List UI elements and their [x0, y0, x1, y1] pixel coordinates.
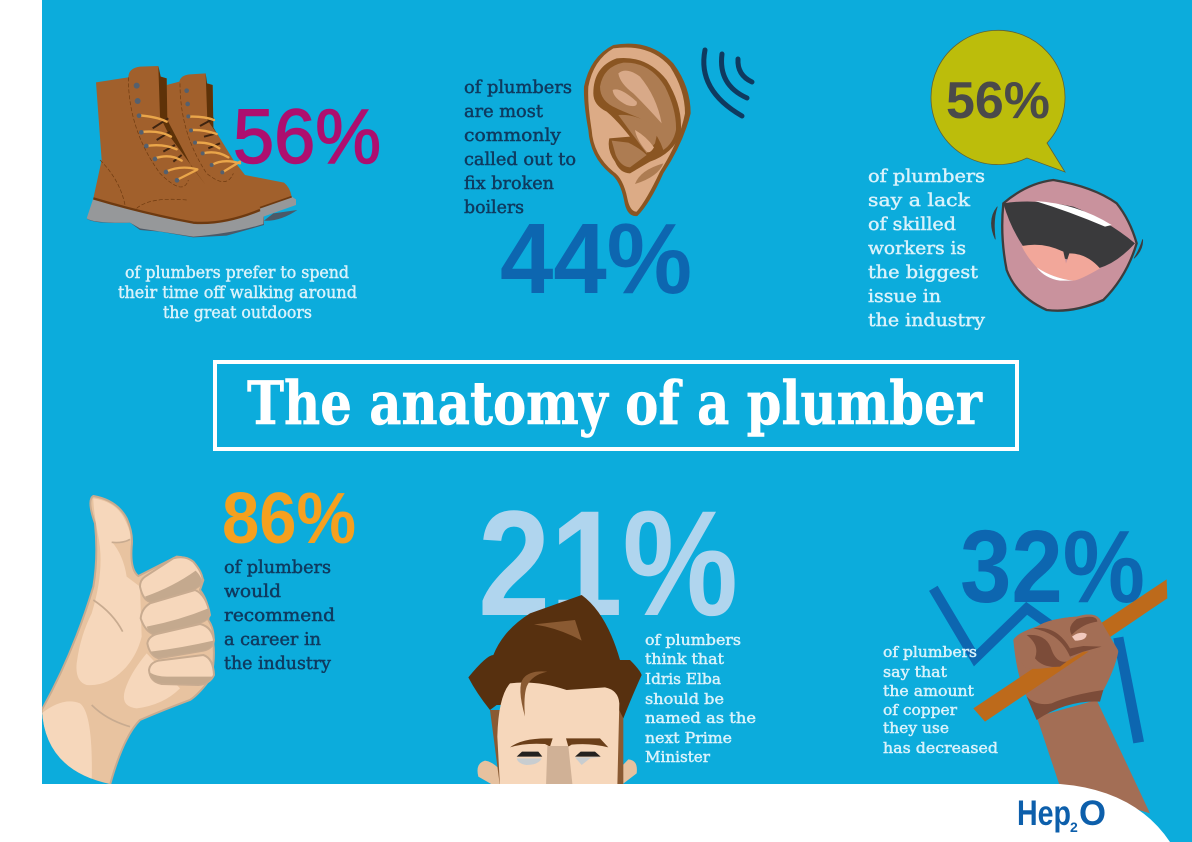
text: copper caption: say that	[883, 663, 947, 681]
text: copper caption: they use	[883, 719, 949, 737]
text: skilled workers caption: issue in	[868, 286, 941, 307]
stat: 32% blue: 32%	[960, 509, 1145, 624]
text: boilers caption: are most	[464, 101, 544, 122]
text: skilled workers caption: the biggest	[868, 262, 979, 283]
text: Idris Elba caption: should be	[645, 690, 724, 708]
text: copper caption: the amount	[883, 682, 974, 700]
icon: boots	[87, 66, 297, 237]
footer white band	[0, 784, 1170, 842]
text: copper caption: of copper	[883, 701, 958, 719]
text: Idris Elba caption: Minister	[645, 748, 711, 766]
text: boilers caption: fix broken	[464, 173, 554, 194]
logo: Hep2O: O	[1079, 794, 1106, 833]
icon: mouth	[991, 180, 1143, 311]
text: copper caption: of plumbers	[883, 643, 977, 661]
text: recommend caption: recommend	[224, 605, 335, 626]
panel: copper statistic	[883, 509, 1167, 813]
text: outdoors caption: the great outdoors	[163, 303, 312, 323]
stat: 56% magenta: 56%	[233, 94, 381, 180]
title: The anatomy of a plumber	[247, 369, 983, 439]
text: recommend caption: would	[224, 581, 281, 602]
text: outdoors caption: of plumbers prefer to spend	[125, 263, 349, 283]
stat: 56% in bubble: 56%	[946, 72, 1050, 130]
panel: boots statistic	[87, 66, 381, 323]
text: boilers caption	[464, 77, 576, 218]
text: copper caption: has decreased	[883, 739, 998, 757]
text: boilers caption: commonly	[464, 125, 562, 146]
text: recommend caption: a career in	[224, 629, 321, 650]
text: Idris Elba caption: think that	[645, 650, 724, 668]
text: boilers caption: boilers	[464, 197, 524, 218]
icon: thumbs up hand	[42, 496, 214, 785]
text: skilled workers caption: workers is	[868, 238, 966, 259]
icon: speech bubble	[931, 30, 1065, 172]
icon: man's head	[468, 595, 642, 790]
stat: 44% blue: 44%	[500, 203, 692, 315]
text: outdoors caption	[118, 263, 357, 323]
text: skilled workers caption	[868, 166, 986, 331]
panel: thumbs up statistic	[42, 479, 356, 785]
icon: sound waves	[704, 50, 752, 116]
title box	[215, 362, 1017, 449]
icon: fist gripping copper pipe over a falling line chart	[933, 579, 1167, 813]
panel: Idris Elba statistic	[468, 510, 756, 784]
stat: 21% pale blue: 21%	[478, 479, 738, 647]
text: skilled workers caption: the industry	[868, 310, 986, 331]
text: skilled workers caption: of plumbers	[868, 166, 985, 187]
text: recommend caption	[224, 557, 335, 674]
logo: Hep2O: Hep	[1017, 794, 1071, 833]
stat: 86% orange: 86%	[222, 479, 356, 559]
text: outdoors caption: their time off walking around	[118, 283, 357, 303]
text: Idris Elba caption: Idris Elba	[645, 670, 721, 688]
text: Idris Elba caption	[645, 631, 756, 766]
text: recommend caption: the industry	[224, 653, 332, 674]
text: Idris Elba caption: next Prime	[645, 729, 732, 747]
text: skilled workers caption: of skilled	[868, 214, 956, 235]
text: recommend caption: of plumbers	[224, 557, 331, 578]
text: copper caption	[883, 643, 998, 757]
panel: ear statistic	[464, 44, 752, 315]
text: Idris Elba caption: of plumbers	[645, 631, 741, 649]
panel: mouth statistic	[868, 30, 1143, 331]
text: Idris Elba caption: named as the	[645, 709, 756, 727]
text: boilers caption: of plumbers	[464, 77, 572, 98]
text: skilled workers caption: say a lack	[868, 190, 971, 211]
icon: ear	[584, 44, 691, 216]
logo: Hep2O: 2	[1070, 819, 1078, 835]
text: boilers caption: called out to	[464, 149, 576, 170]
